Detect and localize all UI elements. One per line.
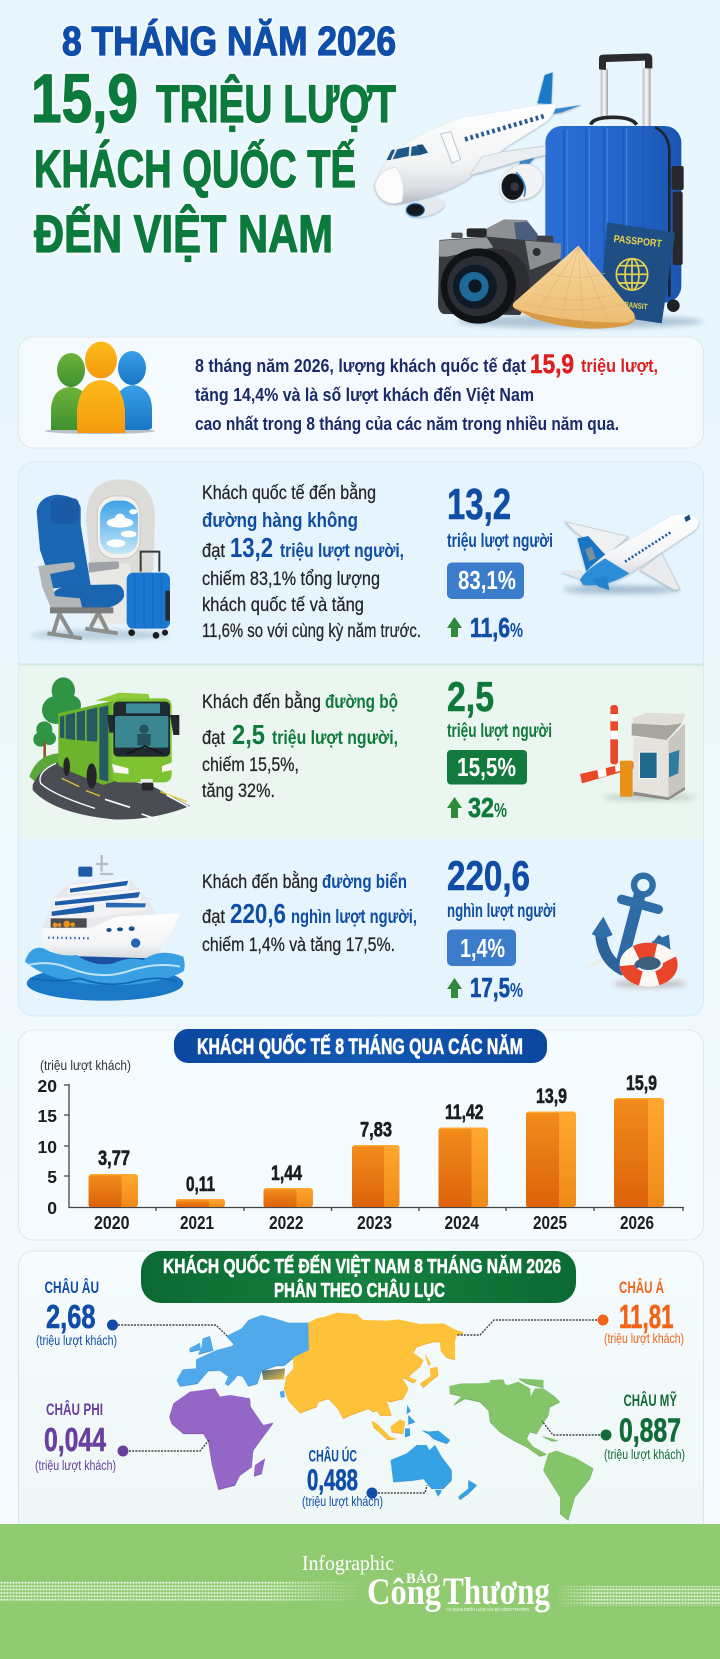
text block: road: Khách đến bằng bbox=[202, 691, 321, 713]
text block: road: tăng 32%. bbox=[202, 781, 275, 802]
text block: summary: triệu lượt, bbox=[581, 356, 658, 376]
title: KHÁCH QUỐC TẾ bbox=[34, 139, 356, 199]
logo: Báo Công Thương: Công bbox=[367, 1572, 441, 1613]
text block: sea bbox=[202, 871, 417, 956]
y axis: 20 bbox=[38, 1076, 57, 1096]
axis unit label: (triệu lượt khách) bbox=[40, 1057, 131, 1073]
metric: road total: 2,5 bbox=[447, 673, 494, 720]
icon: people bbox=[45, 342, 155, 434]
callout: Americas: CHÂU MỸ bbox=[624, 1390, 677, 1410]
callout: Africa bbox=[35, 1400, 209, 1473]
bar: 2020 bbox=[89, 1147, 138, 1233]
metric: air total: 13,2 bbox=[447, 480, 511, 529]
y axis bbox=[38, 1076, 684, 1218]
text block: air: đường hàng không bbox=[202, 510, 358, 532]
bar: 2024: 11,42 bbox=[445, 1101, 484, 1124]
text block: air: chiếm 83,1% tổng lượng bbox=[202, 569, 380, 590]
metric: road share: 15,5% bbox=[457, 752, 516, 782]
y axis: 0 bbox=[47, 1198, 57, 1218]
text block: summary bbox=[195, 349, 658, 434]
footer bbox=[0, 1524, 720, 1659]
callout: Oceania bbox=[302, 1446, 427, 1509]
metric: air share: 83,1% bbox=[458, 565, 516, 595]
heading: map: KHÁCH QUỐC TẾ ĐẾN VIỆT NAM 8 THÁNG NĂM 2026 bbox=[163, 1254, 561, 1278]
panel: transport modes bbox=[18, 462, 704, 1016]
metric: road growth bbox=[447, 792, 507, 823]
metric: air share bbox=[447, 562, 524, 599]
bar: 2025 bbox=[526, 1085, 576, 1233]
callout: Africa: 0,044 bbox=[44, 1421, 106, 1458]
callout: Asia: 11,81 bbox=[619, 1298, 674, 1335]
icon: conical hat bbox=[513, 246, 635, 329]
logo: Báo Công Thương: BÁO bbox=[406, 1570, 438, 1587]
metric: air total bbox=[447, 480, 553, 552]
callout: Europe: (triệu lượt khách) bbox=[36, 1332, 117, 1348]
heading: bar chart bbox=[174, 1029, 547, 1063]
text block: road: đạt bbox=[202, 728, 226, 749]
metric: sea growth: 17,5 bbox=[470, 972, 510, 1003]
y axis: 15 bbox=[38, 1106, 57, 1126]
bar: 2024 bbox=[438, 1101, 488, 1233]
y axis: 5 bbox=[47, 1167, 57, 1187]
metric: sea total: 220,6 bbox=[447, 852, 530, 899]
text block: air: đạt bbox=[202, 541, 226, 562]
icon: passport: PASSPORT bbox=[613, 234, 663, 250]
bar: 2021: 0,11 bbox=[186, 1173, 215, 1196]
illustration: plane, suitcase, camera, hat, passport bbox=[375, 53, 703, 329]
text block: sea: Khách đến bằng bbox=[202, 871, 318, 893]
logo: Báo Công Thương: Thương bbox=[443, 1570, 550, 1613]
text block: summary: cao nhất trong 8 tháng của các năm trong nhiều năm qua. bbox=[195, 414, 619, 434]
panel: bar chart by year bbox=[18, 1029, 704, 1240]
bar: 2026: 2026 bbox=[620, 1213, 654, 1233]
text block: summary: 15,9 bbox=[530, 349, 574, 379]
title bbox=[31, 18, 396, 264]
bar: 2024: 2024 bbox=[444, 1213, 479, 1233]
bar: 2025: 13,9 bbox=[536, 1085, 567, 1108]
panel: world map by continent bbox=[18, 1251, 704, 1541]
map: Africa bbox=[169, 1388, 273, 1489]
bar: 2023: 7,83 bbox=[360, 1118, 392, 1142]
callout: Europe bbox=[36, 1278, 227, 1348]
logo: Báo Công Thương: CƠ QUAN NGÔN LUẬN CỦA BỘ CÔNG THƯƠNG bbox=[446, 1606, 529, 1612]
bar: 2023 bbox=[352, 1118, 400, 1233]
text block: road: triệu lượt người, bbox=[272, 728, 398, 749]
heading: bar chart: KHÁCH QUỐC TẾ 8 THÁNG QUA CÁC NĂM bbox=[197, 1033, 523, 1059]
callout: Oceania: 0,488 bbox=[307, 1464, 358, 1497]
map: Oceania bbox=[391, 1405, 477, 1499]
bar: 2026 bbox=[614, 1072, 664, 1233]
panel: summary bbox=[18, 337, 704, 448]
heading: map bbox=[141, 1251, 576, 1303]
text block: sea: đường biển bbox=[322, 872, 407, 893]
text block: road: chiếm 15,5%, bbox=[202, 755, 299, 776]
text block: road bbox=[202, 691, 398, 802]
metric: sea growth bbox=[447, 972, 523, 1003]
map: Europe bbox=[177, 1315, 309, 1397]
title: 15,9 bbox=[31, 60, 138, 137]
icon: cruise ship on waves bbox=[25, 855, 185, 1001]
icon: anchor and lifebuoy bbox=[587, 876, 687, 987]
metric: road growth: % bbox=[494, 800, 507, 822]
text block: sea: chiếm 1,4% và tăng 17,5%. bbox=[202, 935, 395, 956]
icon: airplane bbox=[375, 72, 582, 220]
panel: air row bbox=[19, 479, 703, 664]
icon: bus on road bbox=[29, 677, 190, 819]
bar: 2020: 3,77 bbox=[98, 1147, 130, 1170]
callout: Americas: (triệu lượt khách) bbox=[604, 1446, 685, 1462]
bar: 2022 bbox=[264, 1162, 313, 1233]
icon: passport bbox=[599, 222, 675, 323]
logo: Báo Công Thương bbox=[302, 1551, 550, 1613]
panel: road row bbox=[19, 666, 703, 839]
icon: camera bbox=[438, 219, 561, 324]
callout: Africa: CHÂU PHI bbox=[46, 1400, 103, 1419]
metric: sea growth: % bbox=[510, 980, 523, 1002]
callout: Asia: (triệu lượt khách) bbox=[604, 1330, 684, 1346]
heading: map: PHÂN THEO CHÂU LỤC bbox=[274, 1278, 445, 1302]
callout: Africa: (triệu lượt khách) bbox=[35, 1457, 116, 1473]
text block: air: 11,6% so với cùng kỳ năm trước. bbox=[202, 621, 421, 642]
icon: suitcase bbox=[545, 53, 684, 312]
callout: Oceania: (triệu lượt khách) bbox=[302, 1493, 383, 1509]
text block: air: 13,2 bbox=[230, 532, 273, 563]
title: ĐẾN VIỆT NAM bbox=[34, 203, 333, 264]
icon: airplane blue bbox=[560, 514, 699, 593]
callout: Asia bbox=[457, 1278, 684, 1346]
panel: sea row bbox=[25, 852, 687, 1003]
metric: sea total: nghìn lượt người bbox=[447, 901, 556, 922]
text block: road: đường bộ bbox=[325, 692, 398, 713]
callout: Europe: CHÂU ÂU bbox=[44, 1278, 99, 1297]
bar: 2025: 2025 bbox=[533, 1213, 567, 1233]
bar: 2026: 15,9 bbox=[626, 1072, 657, 1095]
callout: Asia: CHÂU Á bbox=[619, 1278, 664, 1297]
metric: air total: triệu lượt người bbox=[447, 531, 553, 552]
bar: 2022: 2022 bbox=[269, 1213, 304, 1233]
icon: passport: TRANSIT bbox=[620, 300, 648, 312]
text block: air: triệu lượt người, bbox=[280, 541, 404, 562]
callout: Americas: 0,887 bbox=[619, 1412, 681, 1448]
metric: road total bbox=[447, 673, 552, 742]
metric: air growth: % bbox=[510, 620, 523, 642]
text block: air: khách quốc tế và tăng bbox=[202, 595, 364, 616]
bar: 2021 bbox=[176, 1173, 225, 1233]
metric: air growth bbox=[447, 612, 523, 643]
y axis: 10 bbox=[38, 1137, 57, 1157]
bar: 2022: 1,44 bbox=[271, 1162, 302, 1185]
metric: road total: triệu lượt người bbox=[447, 721, 552, 742]
metric: road growth: 32 bbox=[468, 792, 494, 823]
callout: Europe: 2,68 bbox=[46, 1298, 96, 1335]
metric: sea share: 1,4% bbox=[460, 933, 505, 963]
title: 8 THÁNG NĂM 2026 bbox=[62, 18, 396, 64]
text block: sea: đạt bbox=[202, 907, 226, 928]
map: Americas bbox=[449, 1378, 593, 1520]
text block: air: Khách quốc tế đến bằng bbox=[202, 482, 376, 504]
icon: border gate bbox=[580, 705, 697, 800]
bar: 2021: 2021 bbox=[180, 1213, 214, 1233]
icon: airplane seat and window bbox=[30, 479, 170, 640]
title: TRIỆU LƯỢT bbox=[156, 73, 396, 134]
text block: air bbox=[202, 482, 421, 642]
bar: 2020: 2020 bbox=[94, 1213, 130, 1233]
text block: sea: nghìn lượt người, bbox=[291, 907, 417, 928]
map: Asia bbox=[284, 1313, 464, 1439]
text block: summary: 8 tháng năm 2026, lượng khách quốc tế đạt bbox=[195, 356, 526, 376]
metric: sea total bbox=[447, 852, 556, 922]
callout: Oceania: CHÂU ÚC bbox=[308, 1446, 357, 1466]
logo: Báo Công Thương: Infographic bbox=[302, 1551, 394, 1575]
metric: air growth: 11,6 bbox=[470, 612, 510, 643]
text block: summary: tăng 14,4% và là số lượt khách đến Việt Nam bbox=[195, 385, 534, 405]
metric: sea share bbox=[447, 930, 516, 966]
callout: Americas bbox=[542, 1390, 685, 1462]
bar: 2023: 2023 bbox=[357, 1213, 392, 1233]
text block: sea: 220,6 bbox=[230, 898, 286, 929]
text block: road: 2,5 bbox=[232, 719, 265, 750]
world map bbox=[169, 1313, 593, 1520]
